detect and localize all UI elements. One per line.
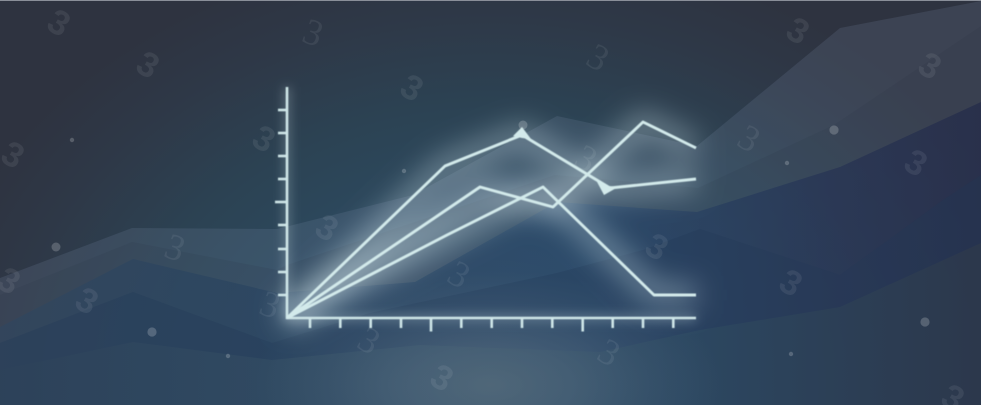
watermark: repeated numeral 3: 3	[730, 117, 767, 161]
watermark: repeated numeral 3: 3	[69, 279, 105, 323]
watermark: repeated numeral 3: 3	[440, 253, 477, 297]
data line 3	[287, 187, 696, 318]
watermark: repeated numeral 3: 3	[350, 319, 387, 363]
y axis with ticks	[275, 87, 287, 319]
peak marker	[513, 127, 531, 139]
watermark: repeated numeral 3: 3	[898, 141, 934, 185]
watermark: repeated numeral 3: 3	[579, 36, 616, 80]
watermark: repeated numeral 3: 3	[246, 117, 282, 161]
watermark: repeated numeral 3: 3	[567, 137, 604, 181]
watermark: repeated numeral 3: 3	[130, 43, 166, 87]
watermark: repeated numeral 3: 3	[41, 1, 77, 45]
x axis with ticks	[286, 318, 696, 332]
line chart	[275, 87, 696, 332]
watermark: repeated numeral 3: 3	[394, 66, 430, 110]
decorative dots	[52, 120, 930, 358]
data line 1	[287, 135, 696, 318]
watermark: repeated numeral 3: 3	[639, 225, 675, 269]
watermark: repeated numeral 3: 3	[254, 283, 286, 328]
trough marker	[596, 180, 618, 195]
watermark: repeated numeral 3: 3	[309, 206, 345, 250]
watermark: repeated numeral 3: 3	[424, 356, 460, 400]
watermark: repeated numeral 3: 3	[159, 226, 191, 271]
frame edge	[0, 0, 981, 1]
data line 2	[287, 122, 696, 318]
watermark: repeated numeral 3: 3	[773, 261, 809, 305]
watermark: repeated numeral 3: 3	[297, 11, 329, 56]
watermark: repeated numeral 3: 3	[780, 9, 816, 53]
chart glow	[287, 87, 696, 318]
watermark: repeated numeral 3: 3	[912, 44, 948, 88]
watermark: repeated numeral 3: 3	[590, 331, 627, 375]
